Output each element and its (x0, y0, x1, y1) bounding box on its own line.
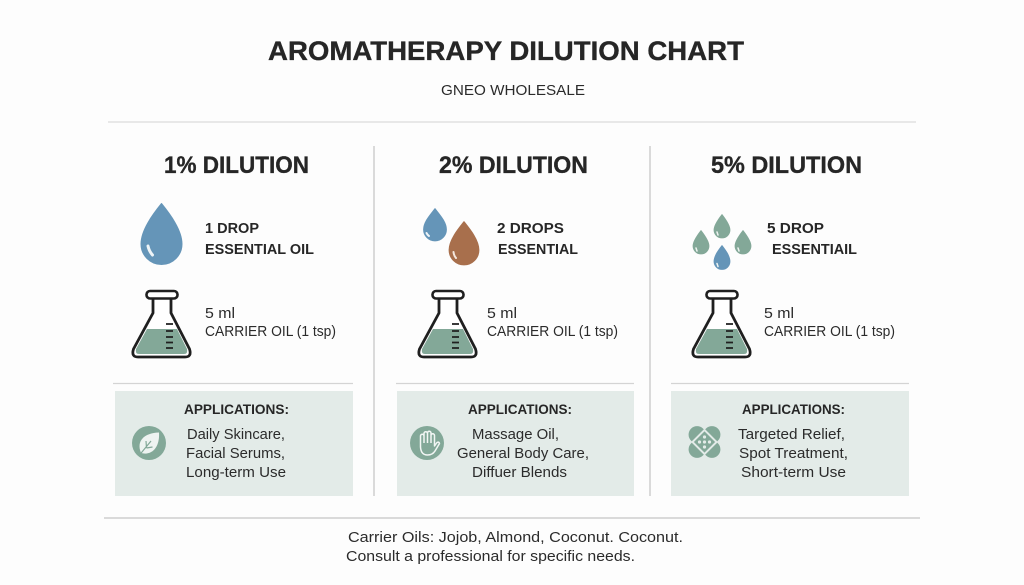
subtitle: GNEO WHOLESALE (441, 82, 585, 99)
footer note: Consult a professional for specific needs. (346, 548, 635, 565)
text: carrier oil amount: CARRIER OIL (1 tsp) (764, 323, 895, 340)
text: 2 drops essential (497, 221, 578, 258)
text: 5 drop essentiail (767, 221, 857, 258)
text: applications list: APPLICATIONS: (742, 402, 845, 417)
text: 2 drops essential: 2 DROPS (497, 221, 564, 237)
text: applications list: Daily Skincare, (187, 426, 285, 443)
text: carrier oil amount: 5 ml (205, 305, 235, 322)
panel: 1% dilution (113, 152, 353, 496)
text: carrier oil amount (205, 305, 336, 340)
text: 1 drop essential oil: ESSENTIAL OIL (205, 242, 314, 258)
text: applications list: Targeted Relief, (738, 426, 845, 443)
panel: applications 1% (115, 391, 353, 496)
text: applications list: APPLICATIONS: (184, 402, 289, 417)
text: applications list (738, 402, 848, 481)
text: applications list: Short-term Use (741, 464, 846, 481)
footer note: Carrier Oils: Jojob, Almond, Coconut. Coconut. (348, 529, 683, 546)
text: applications list (457, 402, 589, 481)
icon: bandage (678, 415, 731, 469)
icon: flask (133, 291, 190, 357)
text: applications list: APPLICATIONS: (468, 402, 572, 417)
icon: cluster of drops (693, 214, 751, 270)
text: 2 drops essential: ESSENTIAL (498, 242, 578, 258)
panel: applications 2% (397, 391, 634, 496)
text: carrier oil amount (487, 305, 618, 340)
text: carrier oil amount: CARRIER OIL (1 tsp) (205, 323, 336, 340)
text: 1 drop essential oil (205, 221, 314, 258)
text: applications list: Massage Oil, (472, 426, 559, 443)
text: carrier oil amount: 5 ml (764, 305, 794, 322)
text: 5 drop essentiail: 5 DROP (767, 221, 824, 237)
text: applications list: General Body Care, (457, 445, 589, 462)
panel: applications 5% (671, 391, 909, 496)
text: 1 drop essential oil: 1 DROP (205, 221, 259, 237)
text: carrier oil amount (764, 305, 895, 340)
icon: single blue drop (141, 204, 182, 264)
text: carrier oil amount: CARRIER OIL (1 tsp) (487, 323, 618, 340)
icon: flask (693, 291, 750, 357)
text: applications list: Long-term Use (186, 464, 286, 481)
heading: 5% dilution: 5% DILUTION (711, 152, 862, 179)
text: applications list: Diffuer Blends (472, 464, 567, 481)
text: applications list: Facial Serums, (186, 445, 285, 462)
title: AROMATHERAPY DILUTION CHART (268, 36, 745, 66)
footer note (346, 529, 683, 565)
icon: leaf (132, 426, 166, 460)
icon: hand (410, 426, 444, 460)
panel: 2% dilution (396, 152, 634, 496)
text: applications list: Spot Treatment, (739, 445, 848, 462)
text: 5 drop essentiail: ESSENTIAIL (772, 242, 857, 258)
text: carrier oil amount: 5 ml (487, 305, 517, 322)
icon: flask (419, 291, 476, 357)
heading: 1% dilution: 1% DILUTION (164, 152, 309, 179)
panel: 5% dilution (671, 152, 909, 496)
heading: 2% dilution: 2% DILUTION (439, 152, 588, 179)
text: applications list (184, 402, 289, 481)
icon: blue and brown drops (424, 208, 479, 265)
